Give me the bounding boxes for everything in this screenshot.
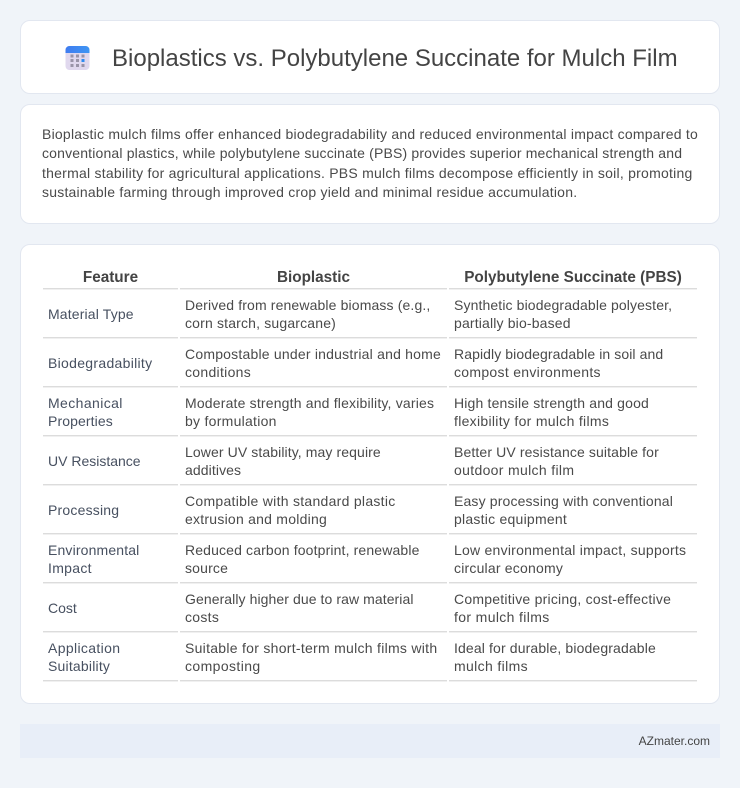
intro text: Bioplastic mulch films offer enhanced biodegradability and reduced environmental impact compared to xyxy=(42,126,698,142)
row: biodegradability: conditions xyxy=(185,364,251,380)
row: environmental impact: Impact xyxy=(48,560,92,576)
intro text: conventional plastics, while polybutylene succinate (PBS) provides superior mechanical strength and xyxy=(42,145,682,161)
row: material type xyxy=(43,297,697,339)
intro text xyxy=(42,126,698,200)
comparison table xyxy=(43,269,697,682)
row: application suitability: Suitable for short-term mulch films with xyxy=(185,640,437,656)
row: environmental impact: Reduced carbon footprint, renewable xyxy=(185,542,420,558)
row: mechanical properties: flexibility for mulch films xyxy=(454,413,609,429)
header: feature: Feature xyxy=(83,269,138,286)
row: application suitability: composting xyxy=(185,658,261,674)
row: mechanical properties: by formulation xyxy=(185,413,277,429)
footer bar xyxy=(20,724,720,758)
icon: calendar grid xyxy=(66,46,90,70)
row: cost: Cost xyxy=(48,600,77,616)
row: application suitability xyxy=(43,640,697,682)
row: material type: Material Type xyxy=(48,306,134,322)
row: application suitability: Ideal for durable, biodegradable xyxy=(454,640,656,656)
row: cost: Generally higher due to raw material xyxy=(185,591,414,607)
row: UV resistance: Better UV resistance suitable for xyxy=(454,444,659,460)
row: material type: Derived from renewable biomass (e.g., xyxy=(185,297,430,313)
row: mechanical properties: Moderate strength and flexibility, varies xyxy=(185,395,434,411)
row: biodegradability xyxy=(43,346,697,388)
row: application suitability: Application xyxy=(48,640,120,656)
title: Bioplastics vs. Polybutylene Succinate for Mulch Film xyxy=(112,45,678,72)
row: material type: partially bio-based xyxy=(454,315,571,331)
row: environmental impact: Low environmental impact, supports xyxy=(454,542,686,558)
row: UV resistance: Lower UV stability, may require xyxy=(185,444,381,460)
row: UV resistance: additives xyxy=(185,462,241,478)
row: environmental impact: source xyxy=(185,560,228,576)
row: processing: plastic equipment xyxy=(454,511,567,527)
row: biodegradability: Rapidly biodegradable in soil and xyxy=(454,346,663,362)
row: biodegradability: compost environments xyxy=(454,364,601,380)
row: UV resistance: outdoor mulch film xyxy=(454,462,574,478)
row: material type: corn starch, sugarcane) xyxy=(185,315,336,331)
row: UV resistance: UV Resistance xyxy=(48,453,141,469)
row: biodegradability: Biodegradability xyxy=(48,355,152,371)
row: environmental impact: Environmental xyxy=(48,542,139,558)
row: processing: Easy processing with conventional xyxy=(454,493,673,509)
row: environmental impact xyxy=(43,542,697,584)
row: mechanical properties: Properties xyxy=(48,413,113,429)
row: cost: costs xyxy=(185,609,219,625)
intro text: thermal stability for agricultural applications. PBS mulch films decompose efficiently in soil, promoting xyxy=(42,165,693,181)
row: processing: extrusion and molding xyxy=(185,511,327,527)
row: material type: Synthetic biodegradable polyester, xyxy=(454,297,672,313)
row: application suitability: mulch films xyxy=(454,658,528,674)
row: processing: Processing xyxy=(48,502,119,518)
title card xyxy=(20,20,720,94)
header: PBS: Polybutylene Succinate (PBS) xyxy=(464,269,682,286)
row: biodegradability: Compostable under industrial and home xyxy=(185,346,441,362)
header: bioplastic: Bioplastic xyxy=(277,269,350,286)
row: mechanical properties xyxy=(43,395,697,437)
row: cost: Competitive pricing, cost-effective xyxy=(454,591,671,607)
row: processing: Compatible with standard plastic xyxy=(185,493,396,509)
comparison table panel xyxy=(20,244,720,704)
row: cost: for mulch films xyxy=(454,609,550,625)
row: environmental impact: circular economy xyxy=(454,560,563,576)
row: cost xyxy=(43,591,697,633)
header: bioplastic xyxy=(180,269,447,289)
intro text panel xyxy=(20,104,720,224)
row: application suitability: Suitability xyxy=(48,658,110,674)
intro text: sustainable farming through improved crop yield and minimal residue accumulation. xyxy=(42,184,577,200)
row: processing xyxy=(43,493,697,535)
row: UV resistance xyxy=(43,444,697,486)
row: mechanical properties: High tensile strength and good xyxy=(454,395,649,411)
row: mechanical properties: Mechanical xyxy=(48,395,123,411)
footer credit: AZmater.com xyxy=(639,734,710,748)
header: feature xyxy=(43,269,178,289)
